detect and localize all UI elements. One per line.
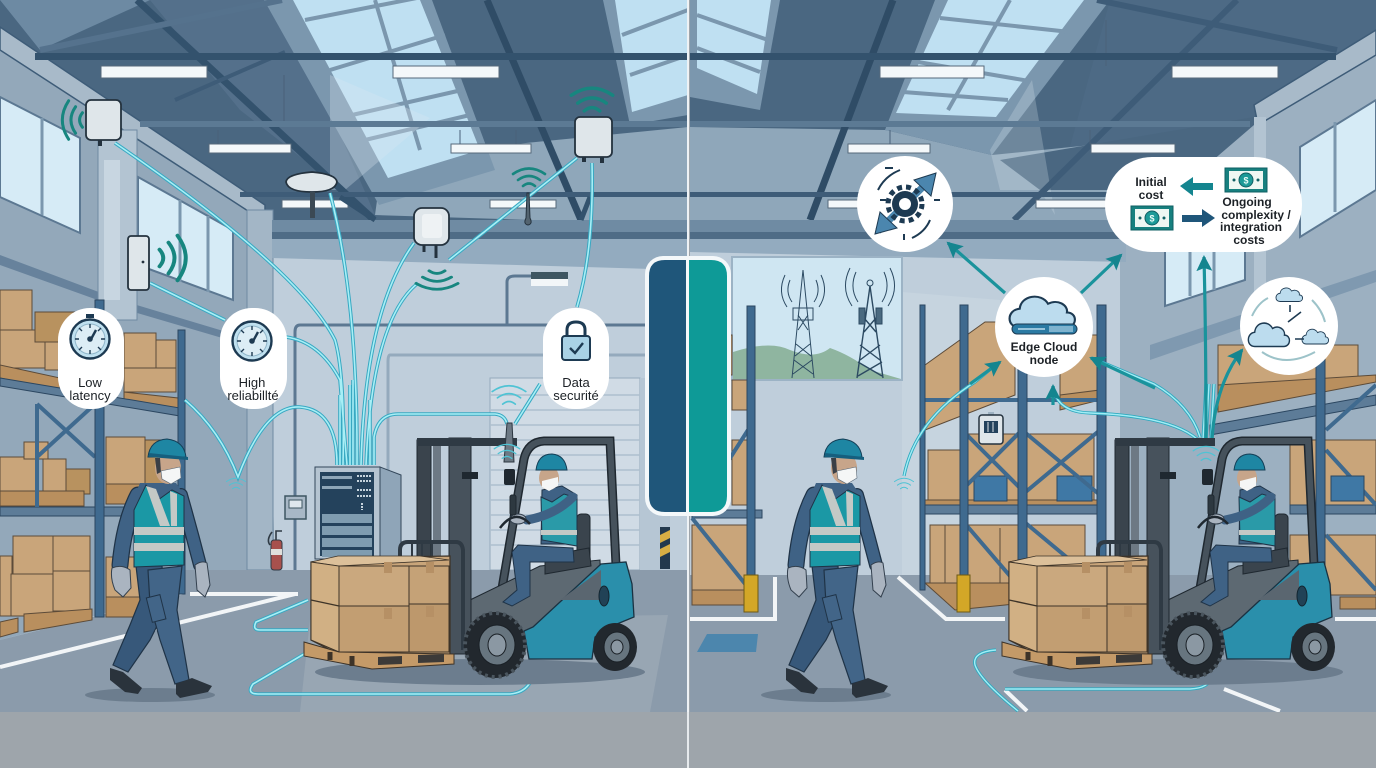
callout: cost comparison: Initial (1135, 175, 1167, 189)
panel: left warehouse scene (0, 0, 688, 712)
callout: data security: securité (553, 388, 599, 403)
icon: banknote (1131, 206, 1173, 230)
right ceiling (690, 0, 1376, 240)
wifi: forklift signal below (494, 444, 520, 458)
icon: gauge (232, 322, 272, 360)
callout: edge cloud node: Edge Cloud (1011, 340, 1077, 354)
icon: padlock (562, 322, 590, 360)
left lamps (101, 66, 556, 208)
panel divider line (687, 0, 689, 768)
callout: low latency: latency (69, 388, 111, 403)
left ceiling (0, 0, 688, 240)
left wall control panel (285, 496, 306, 519)
wifi: antenna signal (513, 168, 545, 186)
tower left (781, 270, 825, 378)
edge connection arrows (948, 243, 1242, 440)
right wireless links (904, 358, 1214, 711)
wifi: top right signal (571, 88, 613, 111)
device: top right access point (575, 117, 612, 163)
wifi: forklift signal (1193, 446, 1219, 460)
callout: low latency: Low (78, 375, 103, 390)
arrow: initial to ongoing (1182, 209, 1215, 227)
worker, left (85, 439, 215, 702)
icon: cloud server (1010, 297, 1077, 334)
callout: high reliability (220, 308, 287, 409)
forklift with driver and boxes, right (1002, 438, 1343, 685)
wifi: forklift signal up (492, 386, 526, 404)
callout: low latency (58, 308, 124, 409)
callout: cost comparison: cost (1139, 188, 1163, 202)
callout: cost comparison: integration (1220, 220, 1282, 234)
forklift antenna (504, 423, 514, 462)
right sloped side wall (1120, 56, 1376, 575)
device: center router (414, 208, 449, 258)
left sloped side wall (0, 30, 275, 640)
callout: data security: Data (562, 375, 590, 390)
center comparison badge (645, 256, 731, 516)
callout: cost comparison: complexity / (1221, 208, 1291, 222)
bottom band (0, 712, 1376, 768)
callout: cost comparison (1105, 157, 1302, 252)
right far-left shelving (692, 306, 762, 612)
hazard post (660, 527, 670, 569)
device: ceiling access point (286, 172, 337, 218)
panel: right warehouse scene (690, 0, 1376, 712)
icon: gear with arrows (875, 168, 940, 240)
callout: data security (543, 308, 609, 409)
forklift with driver and boxes, left (304, 438, 645, 685)
wifi: left wall access point signal (62, 101, 82, 139)
wifi: wall sensor signal (160, 236, 186, 280)
icon: banknote (1225, 168, 1267, 192)
tower right (845, 268, 895, 378)
device: left wall access point (86, 100, 121, 146)
left wireless links (115, 143, 592, 694)
callout: high reliability: High (239, 375, 265, 390)
icon: stopwatch (70, 314, 110, 358)
hanging shelf sensor (979, 412, 1003, 444)
left pallet shelving with boxes (0, 290, 185, 637)
callout: edge cloud node (995, 277, 1093, 377)
fire extinguisher (268, 531, 282, 570)
wifi: shelf sensor signal (226, 478, 246, 489)
right central shelving with boxes (920, 305, 1106, 612)
wifi: worker signal (894, 478, 914, 489)
callout: edge cloud node: node (1030, 353, 1059, 367)
wifi: center router signal (416, 271, 458, 289)
worker, right (761, 439, 891, 702)
icon: connected clouds (1248, 288, 1329, 360)
callout: cost comparison: costs (1233, 233, 1265, 247)
left back wall pipes and door (295, 272, 688, 570)
callout: high reliability: reliabillté (227, 388, 279, 403)
callout: scaling gear (857, 156, 953, 252)
device: antenna (525, 193, 531, 225)
device: wall sensor (128, 236, 149, 290)
window with cell towers (732, 257, 902, 380)
callout: multi-cloud (1240, 277, 1338, 375)
callout: cost comparison: Ongoing (1222, 195, 1272, 209)
right floor (690, 575, 1376, 712)
right far shelving with boxes (1210, 330, 1376, 615)
server rack (315, 467, 401, 559)
right lamps (828, 20, 1278, 208)
arrow: ongoing to initial (1180, 177, 1213, 196)
left floor (0, 570, 688, 712)
